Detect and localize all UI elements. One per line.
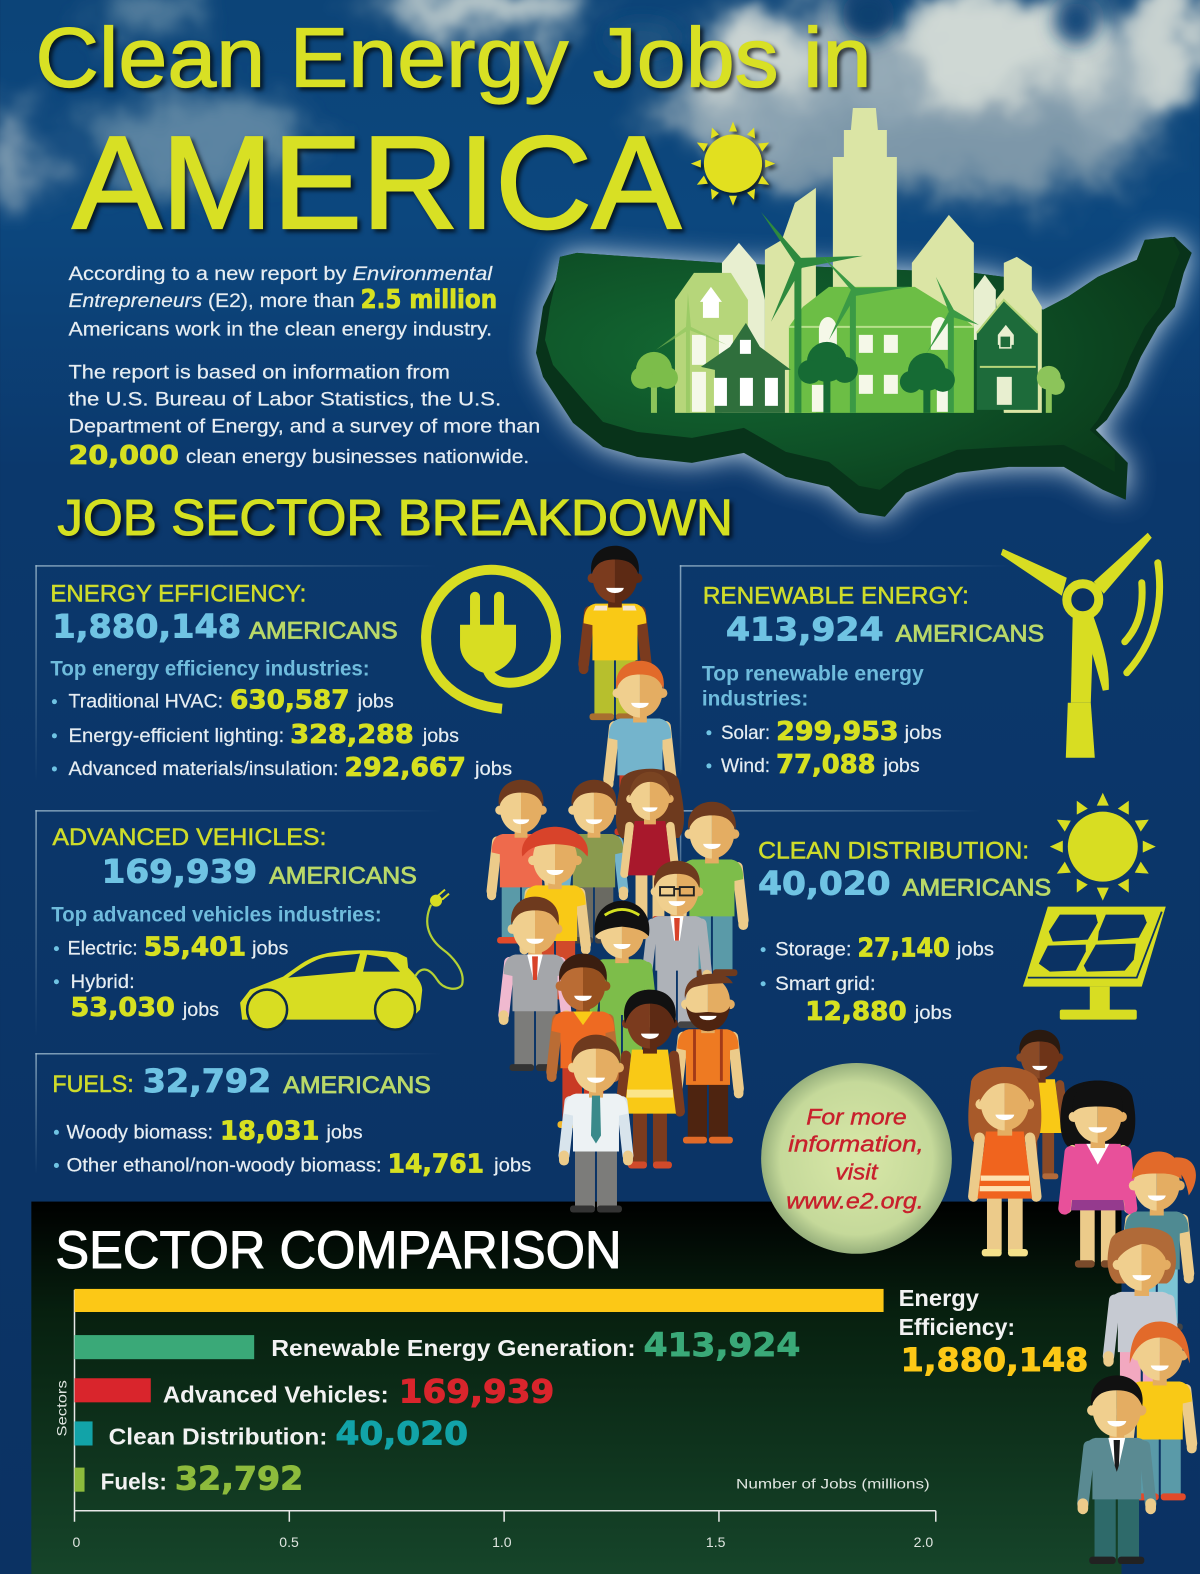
panel: clean distribution: 40,020	[758, 864, 891, 902]
panel: advanced vehicles: 55,401	[144, 933, 246, 963]
title: AMERICA	[72, 109, 681, 256]
panel: advanced vehicles: 169,939	[102, 852, 257, 890]
intro text: According to a new report by Environmental	[68, 264, 493, 285]
callout: more information: information,	[788, 1131, 924, 1156]
person: woman with red hair in yellow shirt	[522, 827, 588, 1000]
panel: fuels: jobs	[493, 1155, 531, 1176]
person: girl in yellow dress, back	[1015, 1030, 1065, 1179]
person: boy in olive vest	[565, 780, 623, 943]
panel: renewable energy: Wind:	[721, 756, 770, 777]
panel: fuels: 14,761	[388, 1149, 484, 1179]
icon: sun	[1050, 793, 1156, 901]
bar: renewable energy: 413,924	[644, 1326, 800, 1364]
bar: renewable energy	[74, 1326, 800, 1364]
panel: clean distribution: CLEAN DISTRIBUTION:	[758, 837, 1029, 864]
panel: advanced vehicles: ADVANCED VEHICLES:	[52, 824, 326, 851]
panel: advanced vehicles: Electric:	[67, 939, 138, 960]
person: woman in salmon shirt	[492, 780, 550, 943]
person: man in orange shirt	[552, 954, 614, 1128]
panel: fuels	[35, 1053, 531, 1179]
map of USA with green city	[536, 108, 1192, 517]
person: man with beard in orange shirt	[677, 974, 739, 1143]
person: woman in teal shirt with ponytail	[1125, 1152, 1196, 1330]
panel: renewable energy: Top renewable energy	[702, 663, 924, 686]
bar: advanced vehicles	[74, 1372, 554, 1410]
heading: sector comparison: SECTOR COMPARISON	[55, 1221, 622, 1280]
panel: sector comparison background	[31, 1202, 1121, 1574]
bar: fuels	[74, 1460, 303, 1498]
map side	[536, 237, 1192, 517]
bar: clean distribution: Clean Distribution:	[109, 1424, 327, 1450]
icon: title sun	[691, 121, 775, 206]
person: woman in grey cardigan	[1108, 1227, 1176, 1416]
panel: energy efficiency: jobs	[474, 759, 512, 780]
axis labels: 1.0	[492, 1534, 512, 1550]
clouds	[0, 0, 1200, 202]
panel: clean distribution: 27,140	[857, 934, 950, 964]
person: woman in orange dress	[968, 1067, 1041, 1256]
panel: renewable energy: Solar:	[721, 723, 770, 744]
bar: clean distribution: 40,020	[335, 1415, 468, 1453]
panel: renewable energy: jobs	[883, 756, 920, 777]
icon: plug	[426, 570, 556, 709]
panel: clean distribution: jobs	[914, 1003, 952, 1024]
person: woman in red dress	[616, 769, 684, 922]
panel: energy efficiency: Energy-efficient lighting:	[68, 726, 284, 747]
intro text: 20,000	[68, 441, 179, 471]
panel: fuels: jobs	[325, 1122, 363, 1143]
label: energy efficiency	[899, 1285, 1088, 1379]
panel: clean distribution: AMERICANS	[903, 874, 1051, 901]
panel: energy efficiency: 328,288	[290, 720, 414, 750]
panel: clean distribution: 12,880	[805, 997, 907, 1027]
title: Clean Energy Jobs in	[35, 10, 872, 104]
icon: electric car	[240, 890, 463, 1030]
panel: energy efficiency: AMERICANS	[249, 617, 398, 644]
person: man in grey suit with glasses	[647, 861, 707, 1028]
bar: fuels: 32,792	[175, 1460, 303, 1498]
person: woman in pink cardigan	[1060, 1080, 1135, 1268]
panel: renewable energy: 77,088	[776, 750, 876, 780]
map top surface	[545, 237, 1180, 490]
panel: energy efficiency: jobs	[357, 692, 394, 713]
bar: advanced vehicles: 169,939	[399, 1372, 554, 1410]
wind turbines on map	[656, 212, 979, 413]
intro text: the U.S. Bureau of Labor Statistics, the U.S.	[68, 390, 501, 411]
panel: renewable energy	[680, 565, 1044, 780]
heading: job sector breakdown: JOB SECTOR BREAKDOWN	[57, 489, 733, 546]
intro text: The report is based on information from	[68, 362, 450, 383]
bar: advanced vehicles: Advanced Vehicles:	[163, 1381, 389, 1407]
axis labels: 2.0	[914, 1534, 933, 1550]
panel: renewable energy: AMERICANS	[896, 620, 1044, 647]
intro text	[68, 264, 540, 471]
panel: energy efficiency: Advanced materials/insulation:	[68, 759, 339, 780]
panel: advanced vehicles: jobs	[251, 939, 288, 960]
panel: advanced vehicles	[35, 810, 442, 1036]
person: man in light blue shirt	[609, 661, 671, 835]
title	[35, 10, 872, 256]
axis labels: Number of Jobs (millions)	[736, 1476, 930, 1492]
panel: fuels: Other ethanol/non-woody biomass:	[66, 1155, 382, 1176]
panel: renewable energy: jobs	[904, 723, 942, 744]
panel: energy efficiency: 292,667	[345, 753, 466, 783]
intro text: Department of Energy, and a survey of more than	[68, 417, 540, 438]
axis labels	[53, 1380, 933, 1550]
person: man in green shirt	[681, 802, 743, 976]
panel: clean distribution: jobs	[956, 940, 994, 961]
panel: advanced vehicles: Hybrid:	[70, 972, 135, 993]
panel: fuels: FUELS:	[52, 1071, 134, 1098]
bar: clean distribution	[74, 1415, 468, 1453]
callout: more information: visit	[835, 1159, 879, 1184]
axis labels: 0	[72, 1534, 80, 1550]
panel: fuels: 18,031	[220, 1116, 319, 1146]
panel: energy efficiency: Traditional HVAC:	[68, 692, 223, 713]
panel: fuels: 32,792	[143, 1062, 271, 1100]
panel: energy efficiency: Top energy efficiency industries:	[50, 658, 370, 681]
person: man in teal suit	[1083, 1375, 1151, 1564]
trees on map	[631, 342, 1065, 413]
panel: renewable energy: RENEWABLE ENERGY:	[703, 582, 969, 609]
axis labels: Sectors	[53, 1380, 69, 1436]
intro text: clean energy businesses nationwide.	[186, 447, 529, 468]
panel: clean distribution	[680, 810, 1051, 1027]
panel: clean distribution: Smart grid:	[775, 974, 876, 995]
axis labels: 0.5	[279, 1534, 299, 1550]
label: energy efficiency: Efficiency:	[899, 1314, 1015, 1340]
person: boy in yellow shirt	[584, 546, 646, 720]
intro text: 2.5 million	[361, 285, 497, 315]
bar chart	[53, 1285, 1088, 1550]
icon: wind turbine	[1001, 533, 1160, 758]
panel: energy efficiency: ENERGY EFFICIENCY:	[50, 580, 306, 607]
label: energy efficiency: 1,880,148	[901, 1341, 1088, 1379]
person: woman in yellow shirt	[1128, 1321, 1192, 1500]
callout: more information	[761, 1063, 952, 1254]
panel: energy efficiency: 1,880,148	[52, 607, 241, 645]
panel: fuels: AMERICANS	[283, 1072, 431, 1099]
panel: clean distribution: Storage:	[775, 940, 851, 961]
bar: energy efficiency	[74, 1289, 884, 1312]
axis labels: 1.5	[706, 1534, 726, 1550]
callout: more information: www.e2.org.	[786, 1189, 924, 1214]
panel: advanced vehicles: AMERICANS	[269, 862, 417, 889]
map glow	[536, 237, 1192, 517]
person: girl in yellow dress	[620, 990, 680, 1169]
city skyline	[722, 108, 1042, 413]
houses	[675, 273, 1038, 413]
panel: fuels: Woody biomass:	[66, 1122, 213, 1143]
people: central crowd	[492, 546, 743, 1213]
people: right group	[968, 1030, 1196, 1564]
panel: renewable energy: industries:	[702, 688, 808, 711]
bar: renewable energy: Renewable Energy Generation:	[271, 1335, 636, 1361]
bar: fuels: Fuels:	[101, 1469, 167, 1495]
icon: solar panel	[1023, 907, 1166, 1020]
panel: energy efficiency: jobs	[422, 726, 459, 747]
person: girl in green shirt with headband	[591, 901, 653, 1074]
panel: energy efficiency	[35, 565, 512, 783]
panel: advanced vehicles: 53,030	[70, 993, 175, 1023]
panel: energy efficiency: 630,587	[230, 686, 350, 716]
person: man in vest with pink sleeves	[504, 897, 566, 1071]
label: energy efficiency: Energy	[899, 1285, 979, 1311]
intro text: Entrepreneurs (E2), more than	[68, 291, 355, 312]
person: man in white shirt with tie	[564, 1035, 628, 1213]
panel: renewable energy: 413,924	[726, 610, 884, 648]
panel: advanced vehicles: jobs	[182, 1000, 219, 1021]
panel: advanced vehicles: Top advanced vehicles industries:	[51, 904, 382, 927]
intro text: Americans work in the clean energy industry.	[68, 319, 492, 340]
callout: more information: For more	[806, 1104, 907, 1129]
panel: renewable energy: 299,953	[776, 717, 899, 747]
